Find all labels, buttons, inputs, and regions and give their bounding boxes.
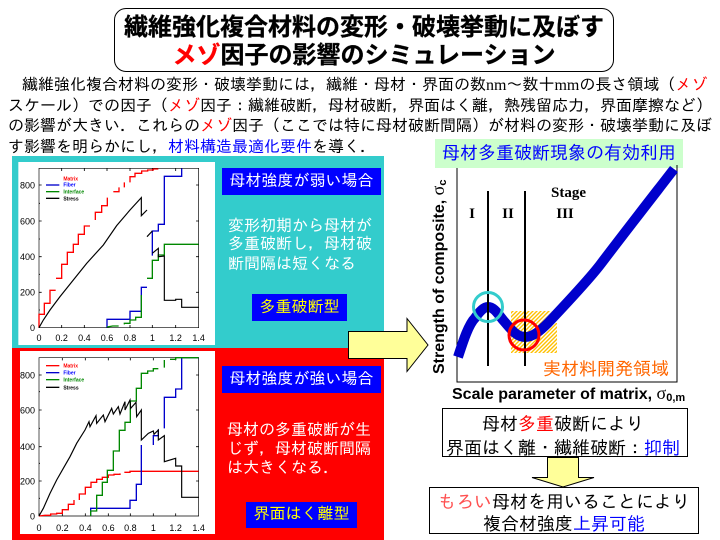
chart: strong matrix simulation: 0.8 — [124, 523, 137, 533]
intro paragraph: す影響を明らかにし，材料構造最適化要件を導く． — [8, 139, 376, 156]
panel: weak matrix (teal) — [12, 156, 384, 348]
chart: weak matrix simulation: 1.4 — [192, 333, 205, 343]
label: interface debonding type: 界面はく離型 — [254, 506, 350, 523]
strength curve — [458, 169, 674, 357]
title box — [114, 8, 614, 72]
development region label: 実材料開発領域 — [543, 359, 669, 378]
text: weak matrix description: 変形初期から母材が — [228, 218, 372, 235]
x axis label: Scale parameter of matrix, σ — [452, 383, 666, 403]
text: weak matrix description: 多重破断し，母材破 — [228, 236, 372, 253]
chart: strong matrix simulation: 200 — [20, 476, 35, 486]
label: strong matrix strength — [222, 366, 381, 393]
label: weak matrix strength: 母材強度が弱い場合 — [230, 173, 374, 190]
chart: weak matrix simulation: Stress — [63, 197, 79, 203]
chart: strong matrix simulation: 800 — [20, 370, 35, 380]
stage labels: Stage — [551, 185, 586, 201]
text: strong matrix description: は大きくなる． — [227, 460, 339, 477]
chart: weak matrix simulation: 0.8 — [124, 333, 136, 343]
chart: strong matrix simulation: Fiber — [63, 371, 76, 377]
stage labels: III — [556, 206, 574, 222]
chart: strong matrix simulation: 0.2 — [56, 523, 69, 533]
text: strong matrix description: 母材の多重破断が生 — [227, 422, 371, 439]
chart: strong matrix simulation: 0 — [36, 523, 42, 533]
text: strong matrix description: じず，母材破断間隔 — [227, 441, 371, 458]
chart: strong matrix simulation: Matrix — [63, 364, 78, 370]
heading: effective use of matrix multiple fracture — [435, 139, 683, 168]
chart: weak matrix simulation: 1 — [150, 333, 155, 343]
arrow: to the right panel — [348, 317, 429, 373]
chart: weak matrix simulation: 0 — [30, 323, 35, 333]
arrow: down to conclusion — [532, 457, 594, 487]
intro paragraph: の影響が大きい．これらのメゾ因子（ここでは特に母材破断間隔）が材料の変形・破壊挙動に及ぼ — [8, 118, 712, 135]
stage labels: II — [502, 206, 514, 222]
callout: conclusion — [429, 487, 699, 534]
y axis label: Strength of composite, σ — [428, 186, 448, 374]
text: weak matrix description — [228, 218, 372, 273]
chart: strong matrix simulation: 400 — [20, 442, 35, 452]
chart: weak matrix simulation — [18, 162, 215, 345]
label: strong matrix strength: 母材強度が強い場合 — [230, 371, 374, 388]
label: interface debonding type — [246, 502, 357, 528]
chart: weak matrix simulation: 400 — [20, 252, 35, 262]
callout: multiple fracture suppresses debonding — [442, 408, 688, 457]
chart: weak matrix simulation: Interface — [63, 190, 84, 196]
heading: effective use of matrix multiple fracture: 母材多重破断現象の有効利用 — [442, 143, 676, 163]
stage labels — [469, 185, 586, 222]
chart: strong matrix simulation: Stress — [63, 385, 79, 391]
chart: weak matrix simulation: 200 — [20, 288, 35, 298]
chart: strong matrix simulation: 1 — [151, 523, 156, 533]
chart: strong matrix simulation: 0.6 — [102, 523, 115, 533]
teal circle — [474, 292, 502, 322]
hatched development region — [511, 311, 557, 353]
chart: weak matrix simulation: 0 — [36, 333, 42, 343]
chart: strength versus scale parameter — [428, 165, 685, 404]
chart: weak matrix simulation: 0.6 — [101, 333, 113, 343]
x axis label: 0,m — [666, 392, 685, 404]
chart: weak matrix simulation: 600 — [20, 216, 35, 226]
chart: weak matrix simulation: 800 — [20, 180, 35, 190]
text: strong matrix description — [227, 422, 371, 477]
chart: strong matrix simulation: Interface — [63, 378, 84, 384]
chart: strong matrix simulation: 0 — [30, 511, 35, 521]
chart: strong matrix simulation — [20, 351, 215, 534]
chart: strong matrix simulation: 600 — [20, 405, 35, 415]
chart: strong matrix simulation: 1.2 — [169, 523, 182, 533]
red circle — [509, 320, 539, 350]
stage dividers — [488, 191, 525, 366]
stage labels: I — [469, 206, 475, 222]
intro paragraph: 繊維強化複合材料の変形・破壊挙動には，繊維・母材・界面の数nm～数十mmの長さ領域（メゾ — [22, 77, 707, 94]
panel: strong matrix (red) — [12, 348, 384, 540]
chart: weak matrix simulation: 0.4 — [78, 333, 91, 343]
chart: weak matrix simulation: Fiber — [63, 183, 76, 189]
chart: weak matrix simulation: 1.2 — [169, 333, 182, 343]
label: multiple fracture type — [252, 294, 347, 321]
callout: multiple fracture suppresses debonding: 母材多重破断により — [482, 414, 644, 434]
intro paragraph — [8, 76, 712, 156]
title box: メゾ因子の影響のシミュレーション — [172, 35, 556, 70]
intro paragraph: スケール）での因子（メゾ因子：繊維破断，母材破断，界面はく離，熱残留応力，界面摩擦など） — [8, 98, 712, 115]
callout: multiple fracture suppresses debonding: 界面はく離・繊維破断：抑制 — [446, 438, 680, 458]
chart: weak matrix simulation: Matrix — [63, 177, 78, 183]
callout: conclusion: もろい母材を用いることにより — [438, 492, 690, 512]
title box: 繊維強化複合材料の変形・破壊挙動に及ぼす — [124, 7, 604, 42]
y axis label: c — [437, 180, 449, 186]
chart: strong matrix simulation: 1.4 — [192, 523, 205, 533]
chart: weak matrix simulation: 0.2 — [55, 333, 68, 343]
chart: strong matrix simulation: 0.4 — [79, 523, 92, 533]
label: multiple fracture type: 多重破断型 — [260, 299, 340, 316]
callout: conclusion: 複合材強度上昇可能 — [483, 514, 645, 534]
label: weak matrix strength — [222, 168, 381, 195]
text: weak matrix description: 断間隔は短くなる — [228, 256, 356, 273]
